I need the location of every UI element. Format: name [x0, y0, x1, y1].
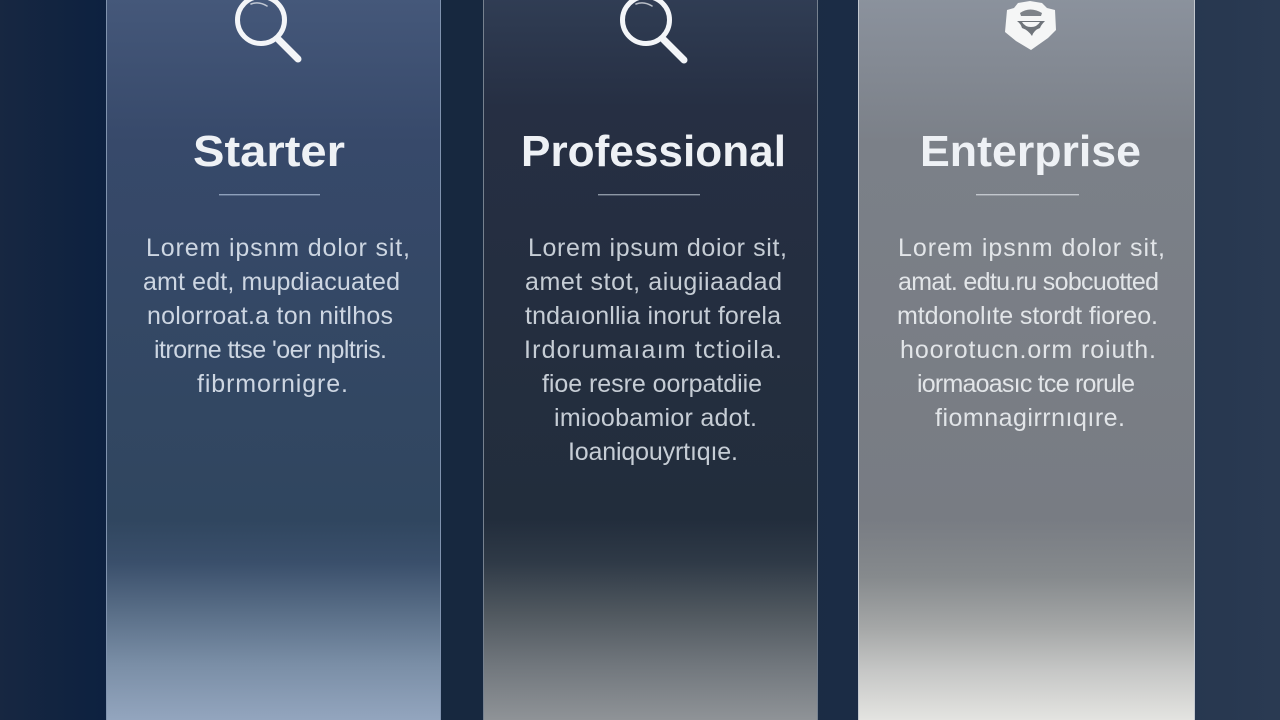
text block: Enterprise description: mtdonolıte stordt fioreo. — [897, 302, 1158, 330]
panel: Enterprise — [858, 0, 1194, 720]
divider: Enterprise — [976, 194, 1079, 195]
panel: Professional — [484, 0, 818, 720]
text block: Enterprise description: iormaoasıc tce rorule — [917, 370, 1135, 398]
text block: Starter description: amt edt, mupdiacuated — [143, 268, 400, 296]
text block: Starter description: Lorem ipsnm dolor sit, — [146, 234, 410, 262]
Enterprise card background — [858, 0, 1194, 720]
heading: Enterprise: Enterprise — [920, 127, 1141, 176]
text block: Starter description: fibrmornigre. — [197, 370, 348, 398]
icon: shield badge — [1005, 1, 1056, 50]
text block: Professional description: amet stot, aiugiiaadad — [525, 268, 782, 296]
heading: Starter: Starter — [193, 127, 345, 176]
text block: Professional description: tndaıonllia inorut forela — [525, 302, 781, 330]
Starter card background — [106, 0, 440, 720]
icon: magnifying glass — [238, 0, 298, 59]
text block: Enterprise description: amat. edtu.ru sobcuotted — [898, 268, 1159, 296]
text block: Enterprise description — [897, 234, 1165, 432]
divider: Professional — [598, 194, 700, 195]
text block: Professional description: Lorem ipsum doior sit, — [528, 234, 787, 262]
text block: Starter description: nolorroat.a ton nitlhos — [147, 302, 393, 330]
text block: Professional description: Ioaniqouyrtıqıe. — [568, 438, 738, 466]
heading: Professional: Professional — [521, 127, 786, 176]
text block: Enterprise description: hoorotucn.orm roiuth. — [900, 336, 1156, 364]
text block: Starter description — [143, 234, 410, 398]
text block: Enterprise description: Lorem ipsnm dolor sit, — [898, 234, 1165, 262]
divider: Starter — [219, 194, 320, 195]
text block: Enterprise description: fiomnagirrnıqıre. — [935, 404, 1125, 432]
text block: Professional description: Irdorumaıaım tctioila. — [524, 336, 782, 364]
text block: Professional description: fioe resre oorpatdiie — [542, 370, 762, 398]
panel: Starter — [106, 0, 440, 720]
text block: Professional description — [524, 234, 787, 466]
Professional card background — [484, 0, 818, 720]
icon: magnifying glass — [622, 0, 684, 60]
text block: Professional description: imioobamior adot. — [554, 404, 757, 432]
text block: Starter description: itrorne ttse 'oer npltris. — [154, 336, 387, 364]
